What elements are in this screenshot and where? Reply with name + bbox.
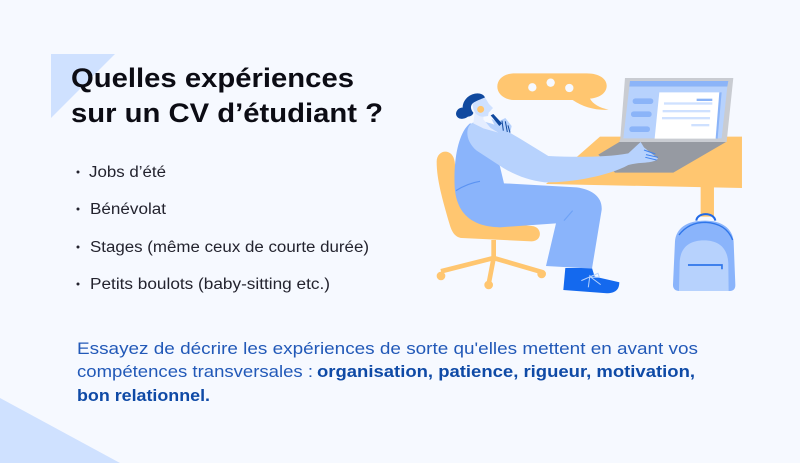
advice paragraph: Essayez de décrire les expériences de sorte qu'elles mettent en avant vos [77, 340, 698, 358]
laptop [598, 78, 733, 173]
bullet list: experiences [76, 164, 369, 293]
advice paragraph: compétences transversales : [77, 363, 313, 381]
list item: small jobs: Petits boulots (baby-sitting etc.) [90, 276, 330, 293]
list item: volunteering: Bénévolat [90, 201, 167, 218]
advice paragraph: bon relationnel. [77, 387, 210, 405]
decorative triangle: top left [51, 54, 115, 118]
face [473, 97, 493, 117]
title [71, 63, 383, 128]
list item: jobs: Jobs d’été [89, 164, 166, 181]
hair [456, 93, 485, 119]
neck [473, 110, 498, 133]
cheek [477, 106, 484, 113]
title: Quelles expériences [71, 63, 354, 93]
desk [546, 137, 742, 217]
advice paragraph [77, 340, 698, 405]
speech bubble [497, 73, 609, 110]
shoe [563, 268, 619, 293]
hand with pen [491, 114, 512, 134]
arm [467, 121, 658, 182]
list item: internships: Stages (même ceux de courte durée) [90, 239, 369, 256]
advice paragraph: organisation, patience, rigueur, motivation, [317, 363, 695, 381]
title: sur un CV d’étudiant ? [71, 98, 383, 128]
backpack [673, 214, 735, 291]
chair [437, 152, 546, 289]
decorative triangle: bottom left [0, 398, 120, 463]
trousers and torso [454, 123, 602, 269]
student figure [454, 93, 658, 293]
illustration: student at desk [437, 73, 742, 293]
